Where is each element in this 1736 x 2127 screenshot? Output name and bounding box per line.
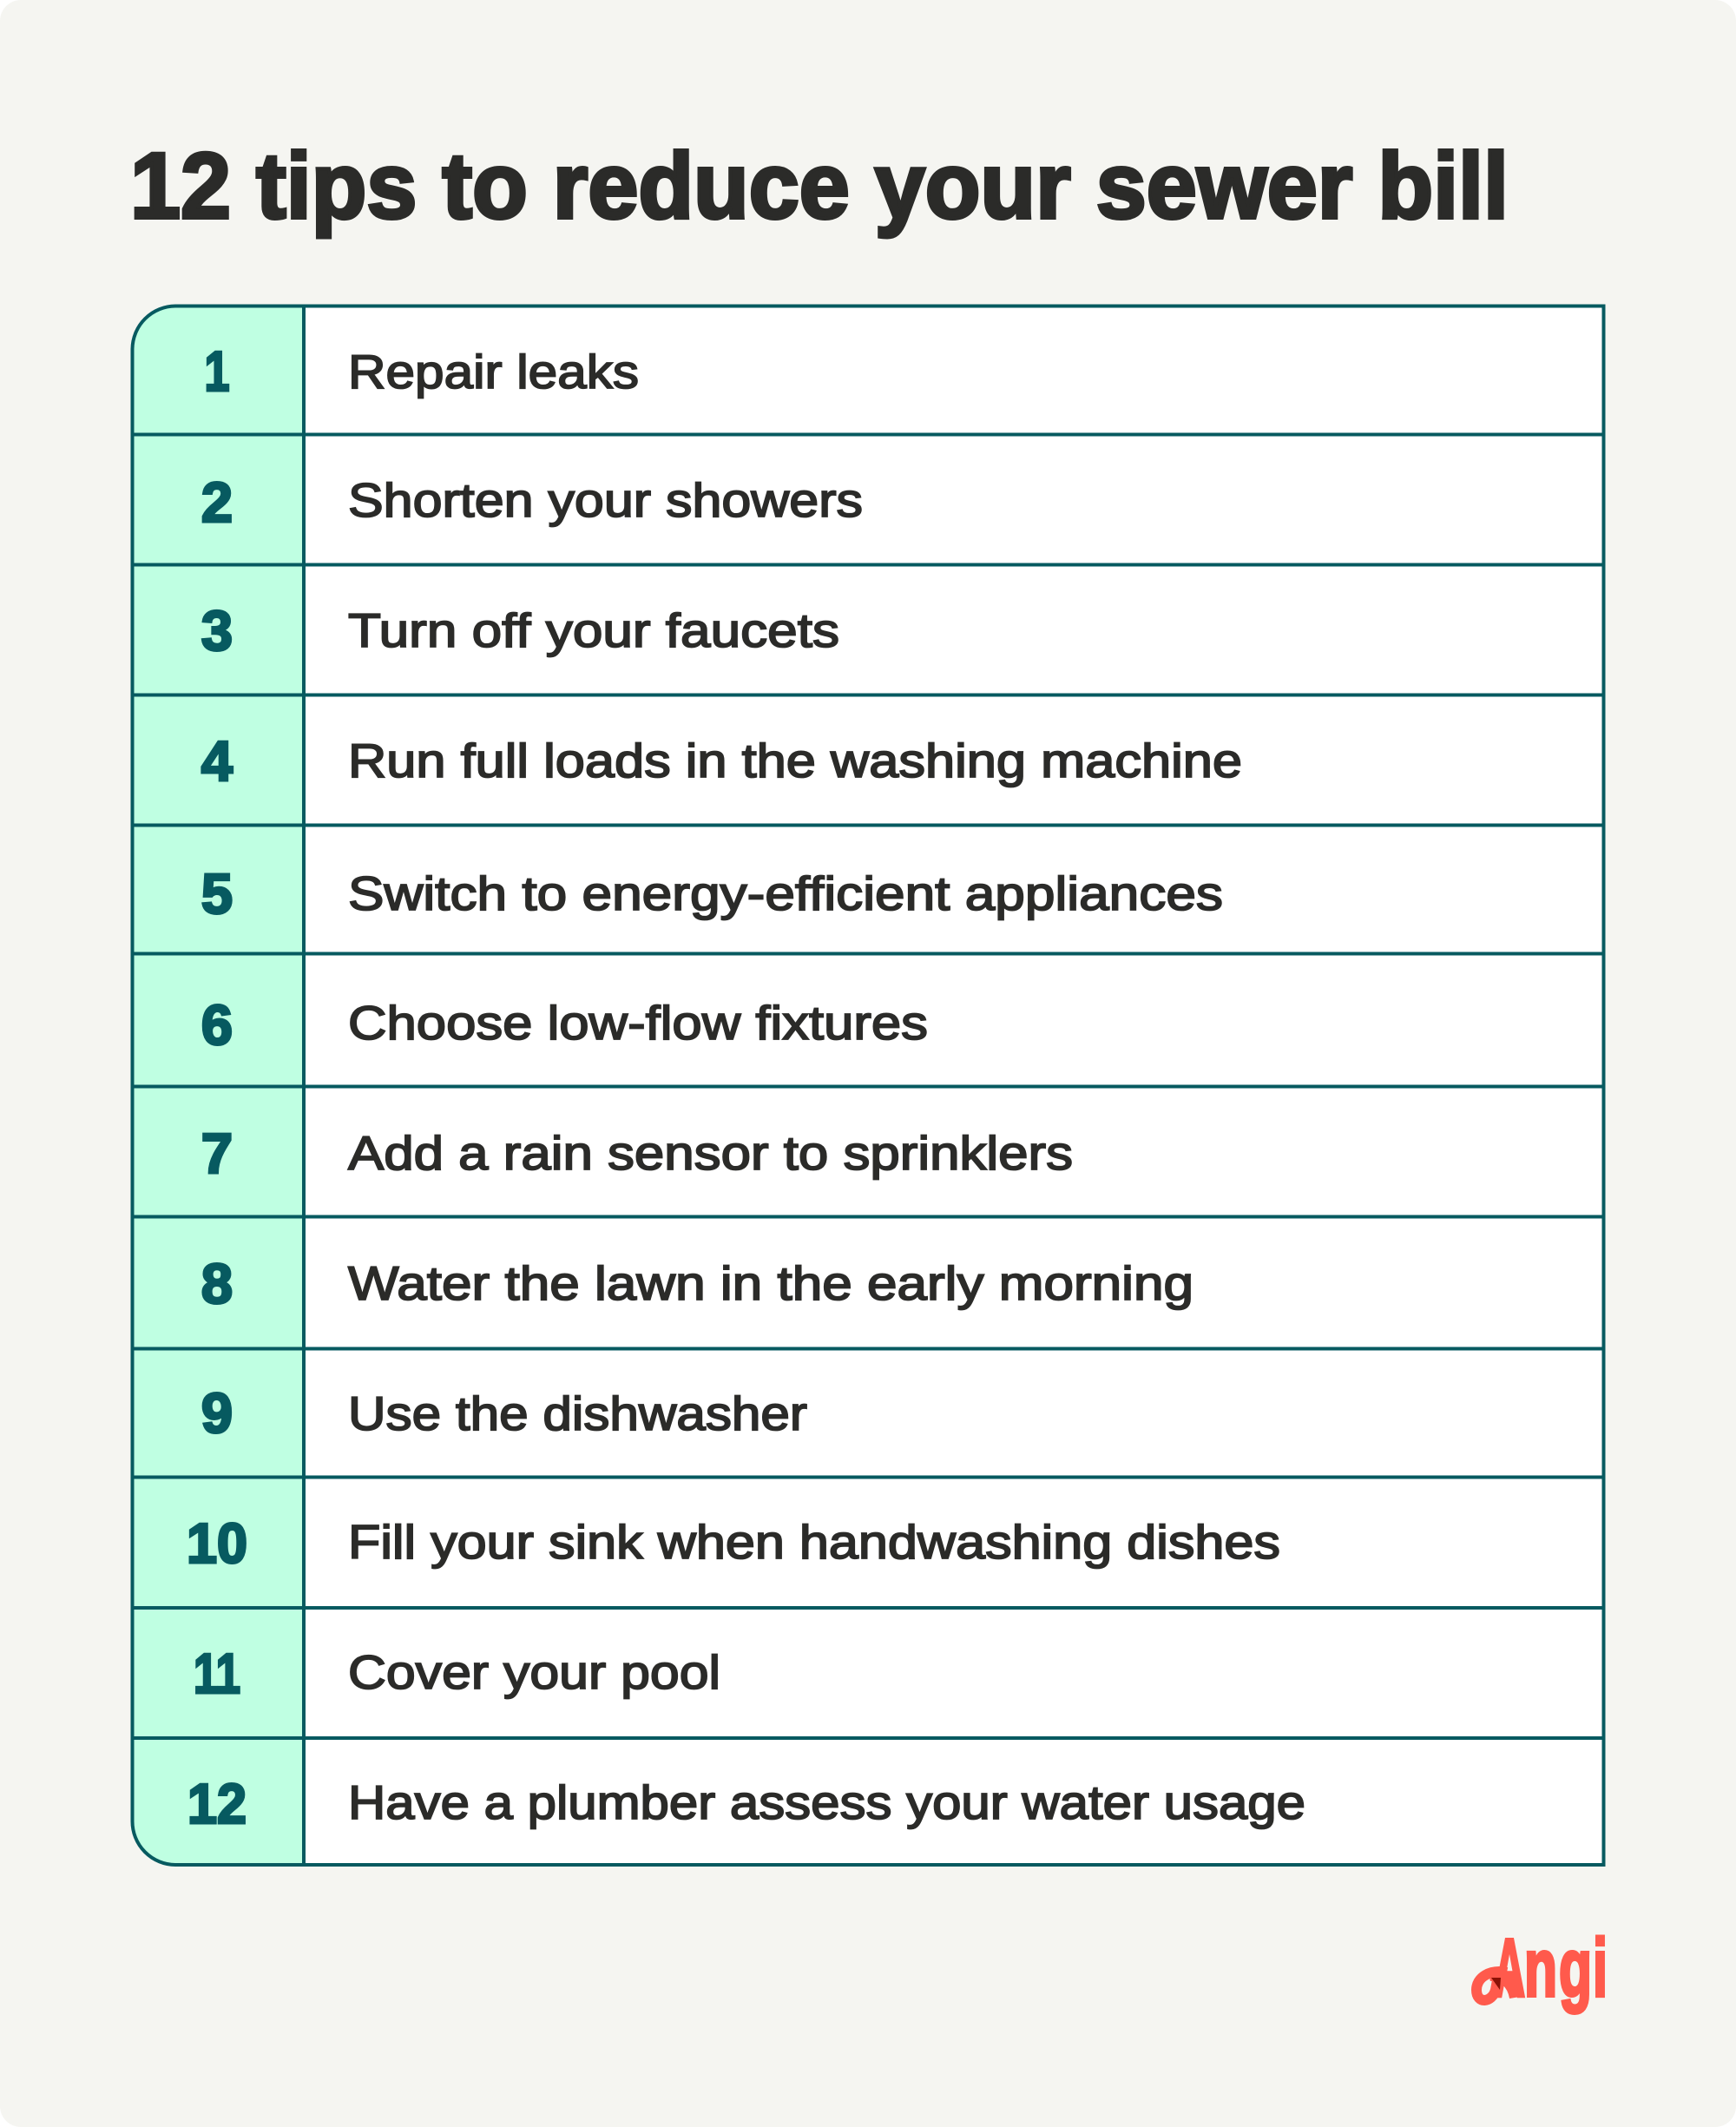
row 1	[205, 339, 639, 403]
row 6: 6	[201, 993, 233, 1057]
logo wordmark: A	[1494, 1922, 1525, 2014]
title: 12 tips to reduce your sewer bill	[130, 133, 1509, 238]
row 3: 3	[201, 599, 233, 662]
row 2: 2	[201, 471, 233, 534]
row 1: Repair leaks	[348, 345, 639, 398]
row 5	[201, 862, 1223, 925]
row 4: Run full loads in the washing machine	[348, 734, 1242, 787]
logo wordmark: g	[1559, 1922, 1592, 2014]
row 11: Cover your pool	[348, 1645, 720, 1699]
table of tips	[132, 306, 1604, 1865]
logo wordmark: i	[1593, 1922, 1608, 2014]
row 11	[194, 1642, 720, 1705]
row 9: 9	[201, 1381, 233, 1445]
row 8	[201, 1252, 1194, 1315]
row 8: 8	[201, 1252, 233, 1315]
row 6: Choose low-flow fixtures	[348, 996, 928, 1050]
row 12: Have a plumber assess your water usage	[348, 1775, 1305, 1829]
row 11: 11	[194, 1642, 240, 1705]
row 7: 7	[201, 1122, 233, 1185]
row 6	[201, 993, 928, 1057]
row 9: Use the dishwasher	[348, 1386, 807, 1440]
Angi logo	[1476, 1922, 1608, 2014]
row 5: 5	[201, 862, 233, 925]
logo wordmark: n	[1524, 1922, 1557, 2014]
row 2: Shorten your showers	[348, 473, 863, 527]
row 2	[201, 471, 863, 534]
row 8: Water the lawn in the early morning	[348, 1256, 1194, 1310]
table panel: white rows	[132, 306, 1604, 1865]
number column	[132, 306, 304, 1865]
row 10: 10	[187, 1511, 247, 1575]
row 12: 12	[187, 1772, 247, 1835]
row 7	[201, 1122, 1073, 1185]
row 12	[187, 1772, 1305, 1835]
logo loop	[1476, 1971, 1515, 2000]
row 10: Fill your sink when handwashing dishes	[348, 1515, 1280, 1569]
row 3	[201, 599, 839, 662]
row 5: Switch to energy-efficient appliances	[348, 866, 1223, 920]
row 1: 1	[205, 339, 229, 403]
row 3: Turn off your faucets	[348, 603, 839, 657]
row 10	[187, 1511, 1280, 1575]
row 4	[201, 729, 1242, 793]
table grid lines	[132, 306, 1604, 1865]
row 7: Add a rain sensor to sprinklers	[348, 1126, 1073, 1180]
row 4: 4	[201, 729, 233, 793]
logo loop shadow	[1491, 1978, 1501, 1990]
row 9	[201, 1381, 807, 1445]
